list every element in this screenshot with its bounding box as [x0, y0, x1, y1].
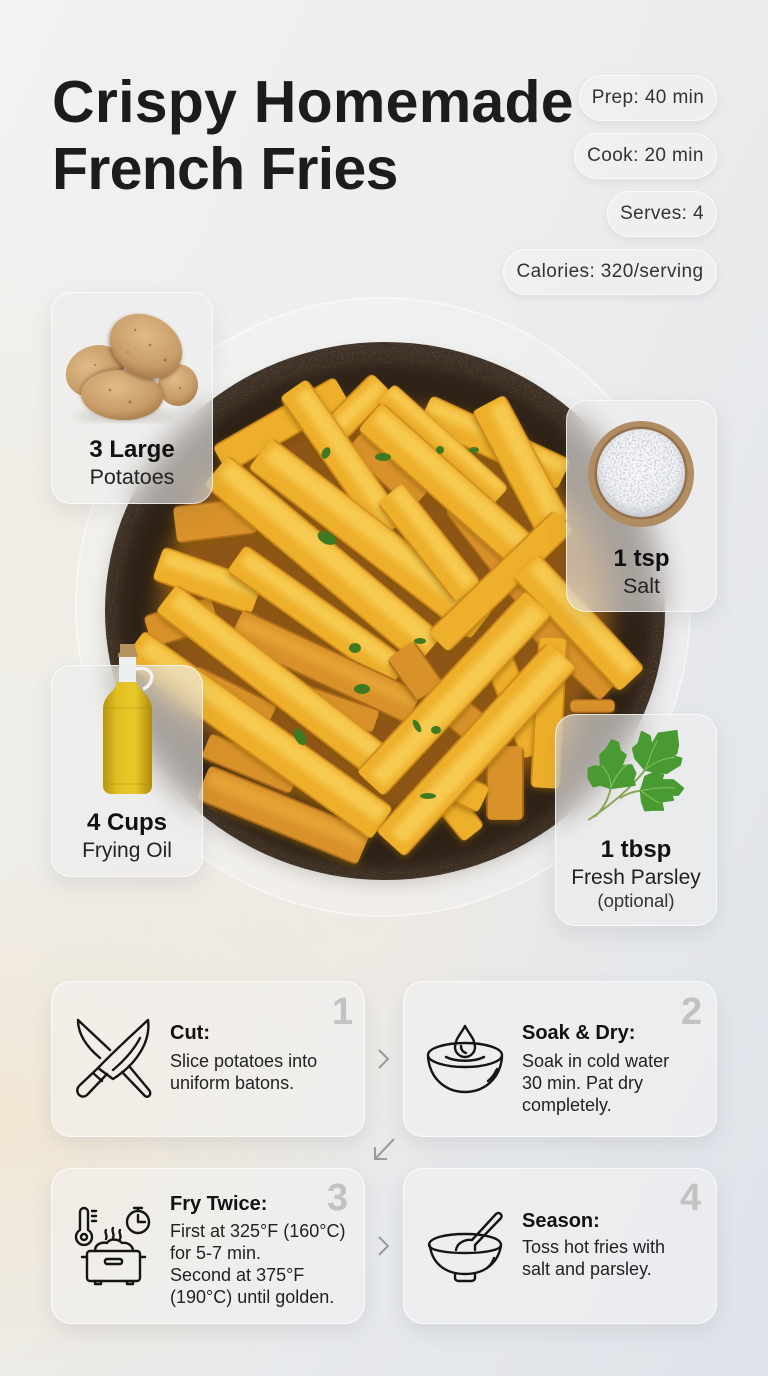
step title: Cut:: [170, 1022, 210, 1044]
stat pill: cook time: Cook: 20 min: [587, 145, 704, 166]
stat pill: prep time: Prep: 40 min: [592, 87, 704, 108]
panel: parsley ingredient: [555, 714, 717, 926]
icon: bowl with water drop: [426, 1024, 504, 1094]
stat pill: calories: Calories: 320/serving: [517, 261, 703, 282]
step title: Fry Twice:: [170, 1193, 267, 1215]
step text: (190°C) until golden.: [170, 1287, 334, 1307]
step text: uniform batons.: [170, 1073, 294, 1093]
arrow: step 3 to 4: [378, 1236, 390, 1256]
title: Crispy Homemade: [52, 69, 574, 135]
step text: [522, 1237, 665, 1279]
step number: 4: [680, 1177, 701, 1219]
icon: potatoes: [66, 312, 198, 424]
step text: [170, 1221, 345, 1307]
icon: parsley sprig: [588, 730, 684, 821]
stat pill: prep time: [579, 75, 717, 121]
step number: 2: [681, 991, 702, 1033]
step title: Soak & Dry:: [522, 1022, 635, 1044]
panel: step 4 season: [403, 1168, 717, 1324]
icon: salt bowl: [588, 421, 694, 527]
step text: Soak in cold water: [522, 1051, 669, 1071]
step text: [170, 1051, 317, 1093]
parsley flakes on fries: [291, 446, 479, 799]
step title: Season:: [522, 1210, 600, 1232]
ingredient name: Potatoes: [90, 465, 174, 489]
ingredient name: Frying Oil: [82, 839, 172, 862]
icon: crossed knives: [76, 1018, 152, 1098]
step number: 1: [332, 991, 353, 1033]
panel: frying oil ingredient: [51, 665, 203, 877]
step text: salt and parsley.: [522, 1259, 652, 1279]
hero: plate, bowl and fries: [76, 298, 690, 916]
stat pill: cook time: [574, 133, 717, 179]
ingredient name: Fresh Parsley: [571, 866, 701, 889]
step text: completely.: [522, 1095, 612, 1115]
step text: for 5-7 min.: [170, 1243, 261, 1263]
quantity: 1 tsp: [613, 545, 670, 572]
stat pill: servings: [607, 191, 717, 237]
ingredient name: Salt: [623, 574, 660, 598]
arrow: step 2 to 3: [374, 1138, 395, 1160]
arrow: step 1 to 2: [378, 1049, 390, 1069]
icon: fryer with thermometer and timer: [74, 1206, 150, 1286]
bowl: [105, 342, 665, 882]
panel: salt ingredient: [566, 400, 717, 612]
plate: [76, 298, 690, 916]
quantity: 1 tbsp: [601, 836, 671, 863]
title: French Fries: [52, 136, 398, 202]
stat pill: servings: Serves: 4: [620, 203, 704, 224]
step text: Slice potatoes into: [170, 1051, 317, 1071]
step text: 30 min. Pat dry: [522, 1073, 643, 1093]
panel: step 3 fry twice: [51, 1168, 365, 1324]
optional note: (optional): [597, 890, 675, 911]
step text: Second at 375°F: [170, 1265, 304, 1285]
icon: oil bottle: [103, 644, 154, 794]
title: [52, 69, 574, 202]
quantity: 3 Large: [89, 436, 175, 463]
step number: 3: [327, 1177, 348, 1219]
icon: bowl with spoon: [428, 1212, 503, 1282]
french fries: [133, 383, 632, 848]
step text: First at 325°F (160°C): [170, 1221, 345, 1241]
panel: potatoes ingredient: [51, 292, 213, 504]
stat pill: calories: [503, 249, 717, 295]
step text: Toss hot fries with: [522, 1237, 665, 1257]
quantity: 4 Cups: [87, 809, 167, 836]
panel: step 2 soak and dry: [403, 981, 717, 1137]
step text: [522, 1051, 669, 1115]
panel: step 1 cut: [51, 981, 365, 1137]
